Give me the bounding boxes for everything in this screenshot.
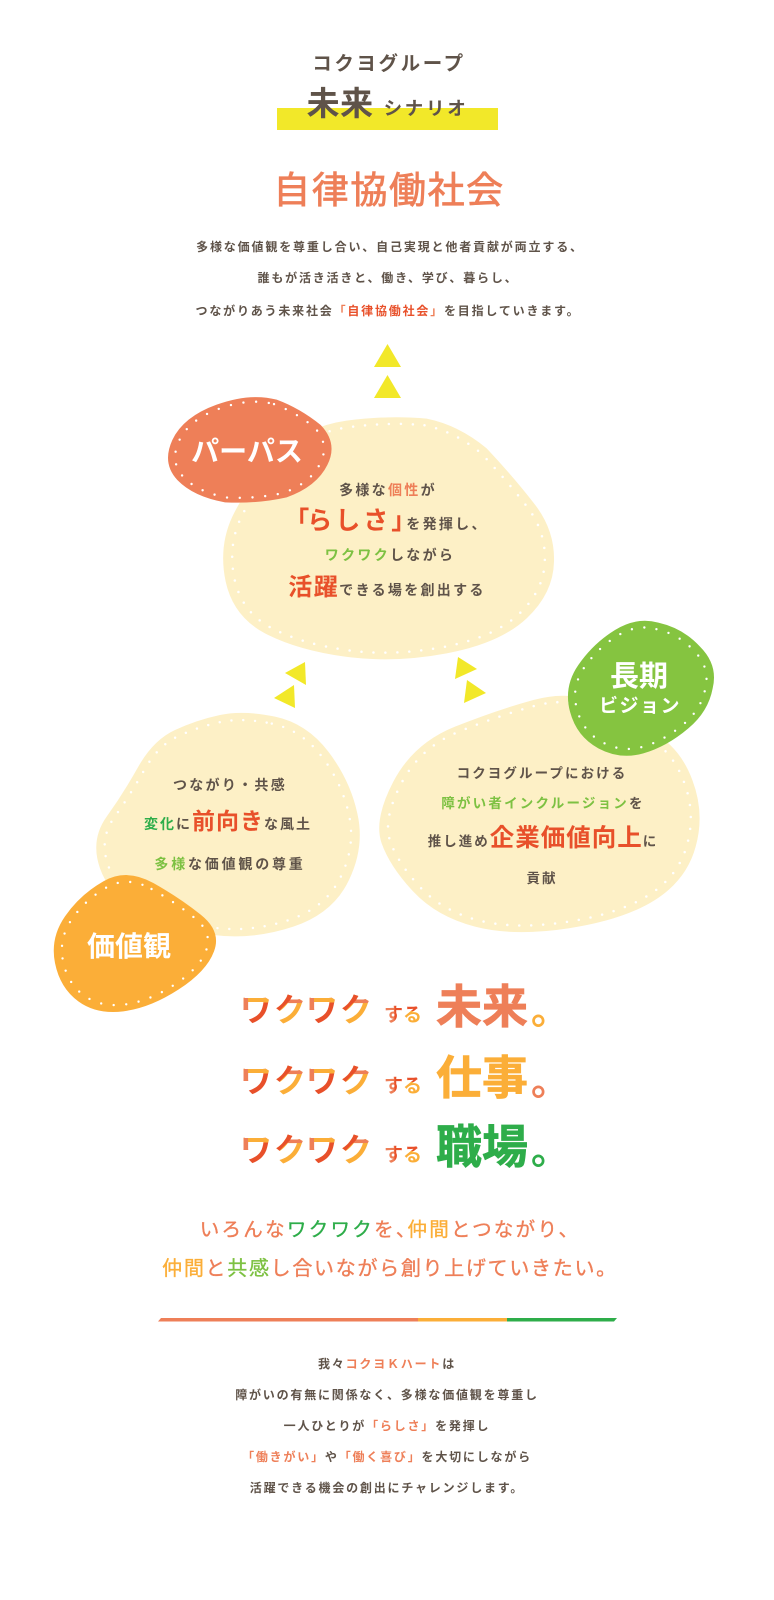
- slogan: ワクワクする未来。: 未来: [436, 981, 528, 1033]
- text: line 3: 多様な価値観の尊重: [154, 856, 306, 872]
- arrow: upward yellow triangles: [374, 344, 401, 398]
- text block: society description: つながりあう未来社会「自律協働社会」を目指していきます。: [196, 304, 580, 318]
- text block: closing statement: 一人ひとりが「らしさ」を発揮し: [284, 1419, 490, 1433]
- text: line 3: 推し進め企業価値向上に: [428, 825, 658, 852]
- tagline: [162, 1219, 618, 1280]
- tagline: いろんなワクワクを、仲間とつながり、: [200, 1219, 580, 1241]
- text: line 2: 「らしさ」を発揮し、: [284, 507, 488, 535]
- badge label: 価値観: 価値観: [87, 931, 171, 962]
- blob: pale vision background: [379, 696, 700, 932]
- text: line 2: 障がい者インクルージョンを: [441, 796, 645, 811]
- badge: green blob: [568, 620, 714, 756]
- text: line 1: コクヨグループにおける: [457, 766, 627, 781]
- slogan: ワクワクする未来。: す: [384, 1005, 403, 1026]
- tagline: 仲間と共感し合いながら創り上げていきたい。: [162, 1258, 618, 1280]
- slogan: ワクワクする仕事。: る: [403, 1076, 422, 1097]
- slogan: ワクワクする職場。: る: [403, 1145, 422, 1166]
- text: line 3: ワクワクしながら: [325, 547, 455, 563]
- blob: pale purpose background: [223, 417, 554, 660]
- title: コクヨグループ: コクヨグループ: [312, 53, 466, 75]
- arrow: right yellow triangles: [455, 657, 486, 703]
- panel: パーパス: [168, 397, 554, 660]
- text: line 2: 変化に前向きな風土: [144, 808, 312, 834]
- text block: closing statement: 我々コクヨＫハートは: [318, 1357, 456, 1371]
- arrow: left yellow triangles: [274, 662, 306, 708]
- text: line 1: 多様な個性が: [339, 482, 437, 498]
- yellow highlight band: [277, 108, 498, 130]
- text block: closing statement: 活躍できる機会の創出にチャレンジします。: [250, 1481, 524, 1495]
- slogan: ワクワクする未来。: [244, 981, 569, 1033]
- slogan: ワクワクする職場。: す: [384, 1145, 403, 1166]
- text block: society description: 多様な価値観を尊重し合い、自己実現と他者貢献が両立する、: [196, 240, 584, 254]
- text block: society description: 誰もが活き活きと、働き、学び、暮らし、: [258, 271, 518, 285]
- slogan: ワクワクする仕事。: [244, 1052, 569, 1104]
- slogan: ワクワクする仕事。: す: [384, 1076, 403, 1097]
- slogan: ワクワクする職場。: [244, 1121, 569, 1173]
- heading: 自律協働社会: 自律協働社会: [273, 170, 505, 211]
- heading text: 未来 シナリオ: [307, 85, 468, 122]
- slogan: ワクワクする職場。: 職場: [436, 1121, 528, 1173]
- panel: 長期ビジョン: [379, 620, 714, 932]
- slogan: ワクワクする未来。: る: [403, 1005, 422, 1026]
- text: 。: [531, 1062, 569, 1104]
- badge: orange blob: [54, 875, 216, 1012]
- text block: closing statement: 障がいの有無に関係なく、多様な価値観を尊重し: [235, 1388, 539, 1402]
- blob: pale values background: [96, 712, 360, 936]
- badge: coral blob: [168, 397, 332, 503]
- text block: closing statement: [235, 1357, 539, 1495]
- text block: society description: [196, 240, 584, 318]
- divider: tricolor line: [158, 1318, 617, 1322]
- title: 未来シナリオ with yellow band: [277, 85, 498, 130]
- badge label: ビジョン: ビジョン: [599, 696, 681, 717]
- badge label: パーパス: パーパス: [191, 436, 303, 467]
- text: line 4: 貢献: [526, 871, 558, 886]
- text: 。: [531, 1131, 569, 1173]
- badge label: 長期: 長期: [610, 661, 668, 693]
- text: line 1: つながり・共感: [173, 777, 287, 793]
- slogan: ワクワクする仕事。: 仕事: [436, 1052, 528, 1104]
- panel: 価値観: [54, 712, 360, 1012]
- text block: closing statement: 「働きがい」や「働く喜び」を大切にしながら: [242, 1450, 532, 1464]
- text: line 4: 活躍できる場を創出する: [288, 574, 486, 601]
- text: 。: [531, 991, 569, 1033]
